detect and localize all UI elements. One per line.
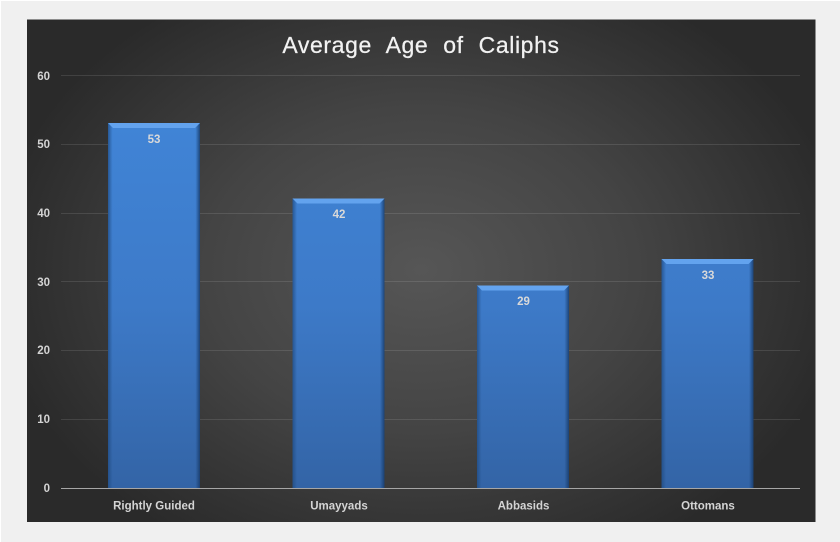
y axis labels: 0 [44, 483, 50, 495]
bar: Ottomans 33: 33 [702, 270, 714, 282]
y axis labels: 20 [37, 345, 50, 357]
bar: Abbasids 29: 29 [517, 296, 530, 308]
x axis labels: Ottomans [681, 500, 735, 512]
y axis labels: 10 [37, 414, 50, 426]
gridlines [61, 76, 800, 420]
bar: Rightly Guided 53 [108, 123, 200, 488]
x axis line [61, 488, 800, 490]
y axis labels: 50 [37, 139, 50, 151]
bar: Umayyads 42 [292, 198, 384, 488]
x axis labels: Abbasids [498, 500, 549, 512]
bar: Abbasids 29 [477, 286, 569, 488]
bar: Ottomans 33 [662, 259, 754, 488]
y axis labels [37, 71, 50, 495]
y axis labels: 40 [37, 208, 50, 220]
y axis labels: 60 [37, 71, 50, 83]
x axis labels: Umayyads [310, 500, 368, 512]
bar: Umayyads 42: 42 [333, 209, 345, 221]
x axis labels: Rightly Guided [113, 500, 195, 512]
bar: Rightly Guided 53: 53 [148, 134, 160, 146]
x axis labels [113, 500, 735, 512]
y axis labels: 30 [37, 277, 50, 289]
title: Average Age of Caliphs [282, 32, 560, 58]
